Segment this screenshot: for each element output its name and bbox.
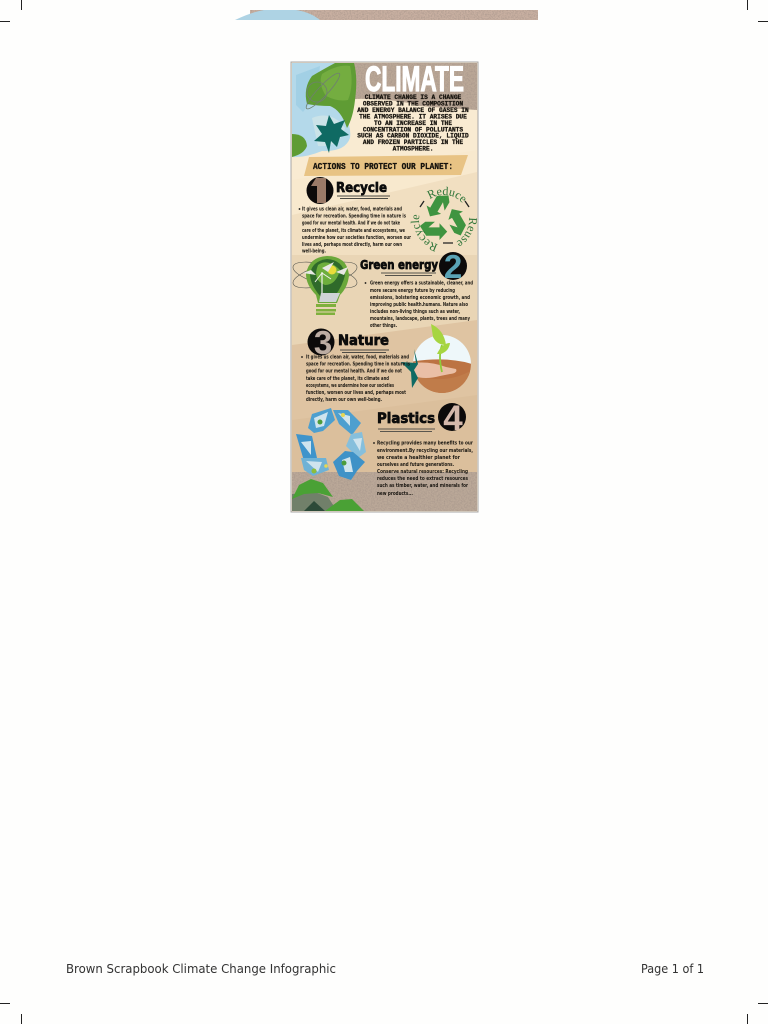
intro paragraph: AND ENERGY BALANCE OF GASES IN [357, 107, 469, 114]
intro paragraph: OBSERVED IN THE COMPOSITION [363, 100, 463, 108]
blue water shape [292, 63, 350, 157]
recycle text: good for our mental health. And if we do not take [302, 220, 400, 226]
poster background [292, 150, 477, 480]
nature text: space for recreation. Spending time in nature is [306, 362, 410, 368]
rocks and grass [292, 479, 364, 511]
green energy text: mountains, landscape, plants, trees and many [370, 316, 471, 322]
green corner blob [292, 134, 307, 157]
actions banner: ACTIONS TO PROTECT OUR PLANET: [313, 162, 453, 172]
icon: recycle arrows with words: Recycle [410, 214, 438, 252]
plastics text: Recycling provides many benefits to our [377, 440, 473, 446]
section 3: nature [301, 324, 472, 403]
recycle text: It gives us clean air, water, food, materials and [302, 206, 402, 212]
green energy text: other things. [370, 323, 397, 329]
recycle text: undermine how our societies function, worsen our [302, 235, 411, 241]
actions banner [304, 155, 468, 176]
icon: recycle arrows with words: Reduce [426, 186, 466, 202]
teal star [401, 349, 418, 388]
green energy text: includes non-living things such as water, [370, 309, 460, 315]
nature text: It gives us clean air, water, food, materials and [306, 354, 409, 360]
green energy text: emissions, bolstering economic growth, and [370, 295, 470, 301]
recycle heading: Recycle [336, 181, 387, 196]
icon: recycle arrows with words [410, 186, 477, 252]
number 4 badge: 4 [443, 399, 463, 438]
green energy heading: Green energy [360, 258, 438, 272]
intro paragraph: AND FROZEN PARTICLES IN THE [363, 139, 463, 146]
recycle text: lives and, perhaps most directly, harm our own [302, 242, 402, 248]
icon: recycling symbol from plastic bottles [296, 408, 366, 480]
number 1 badge [306, 177, 334, 204]
plastics text: environment.By recycling our materials, [377, 448, 473, 454]
nature text: good for our mental health. And if we do not [306, 368, 402, 374]
plastics heading: Plastics [377, 411, 435, 427]
plastics text: we create a healthier planet for [377, 455, 460, 461]
number 4 badge [438, 403, 466, 431]
plastics text [373, 440, 473, 497]
recycle text [299, 206, 411, 254]
plastics text: such as timber, water, and minerals for [377, 483, 468, 489]
footer page number: Page 1 of 1 [641, 962, 704, 976]
teal star [314, 115, 349, 153]
nature text: function, worsen our lives and, perhaps most [306, 390, 406, 396]
section 2: green energy [291, 248, 473, 329]
number 3 badge [308, 328, 334, 356]
intro paragraph: CLIMATE CHANGE IS A CHANGE [365, 94, 462, 101]
nature text [301, 354, 410, 403]
green energy text: more secure energy future by reducing [370, 288, 455, 294]
nature text: ecosystems, we undermine how our societies [306, 383, 394, 389]
orbit outline on leaf [306, 72, 340, 110]
plastics text: reduces the need to extract resources [377, 476, 468, 482]
green energy text: improving public health.humans. Nature also [370, 302, 468, 308]
icon: recycle arrows with words: Reuse [456, 218, 477, 246]
intro paragraph: TO AN INCREASE IN THE [374, 120, 452, 127]
icon: seedling in hand [401, 324, 472, 396]
intro paragraph: SUCH AS CARBON DIOXIDE, LIQUID [357, 132, 469, 140]
plastics text: Conserve natural resources: Recycling [377, 469, 468, 475]
green leaf [306, 63, 356, 128]
recycle text: space for recreation. Spending time in nature is [302, 214, 406, 220]
green energy text [365, 280, 473, 329]
section 1: recycle [298, 177, 477, 254]
recycle text: well-being. [302, 248, 326, 254]
title: CLIMATE [365, 60, 464, 99]
intro paragraph [357, 94, 469, 152]
footer title: Brown Scrapbook Climate Change Infographic [66, 962, 336, 976]
previous page strip [235, 10, 538, 20]
plastics text: ourselves and future generations. [377, 462, 454, 468]
icon: lightbulb with orbits [291, 256, 359, 315]
recycle text: care of the planet, its climate and ecosystems, we [302, 228, 405, 234]
section 4: plastics [296, 399, 473, 497]
infographic poster [290, 62, 478, 512]
number 3 badge: 3 [314, 324, 332, 361]
number 2 badge: 2 [444, 248, 462, 285]
green energy text: Green energy offers a sustainable, cleaner, and [370, 280, 473, 286]
textured header band [350, 63, 477, 110]
plastics text: new products... [377, 491, 413, 497]
nature text: take care of the planet, its climate and [306, 376, 389, 382]
textured ground [292, 472, 477, 511]
intro paragraph: CONCENTRATION OF POLLUTANTS [363, 126, 463, 134]
nature text: directly, harm our own well-being. [306, 397, 382, 403]
number 2 badge [439, 252, 467, 280]
intro paragraph: ATMOSPHERE. [393, 146, 433, 152]
nature heading: Nature [338, 333, 389, 349]
intro paragraph: THE ATMOSPHERE. IT ARISES DUE [359, 114, 467, 120]
